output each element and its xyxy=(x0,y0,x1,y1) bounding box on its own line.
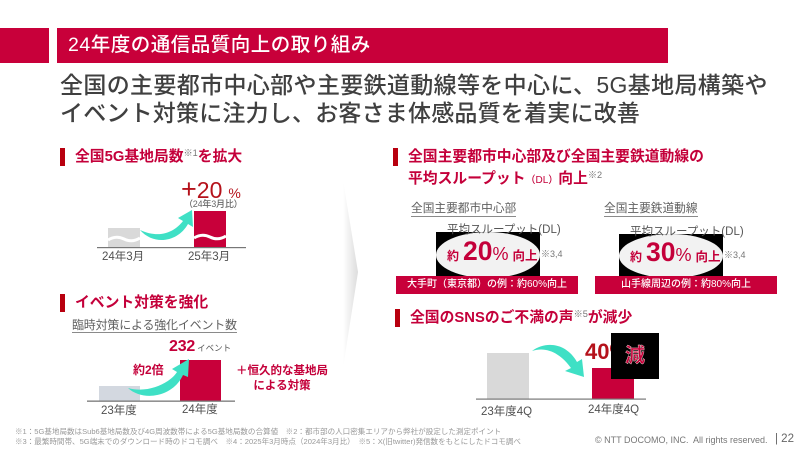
axis label: 24年度4Q: 24年度4Q xyxy=(588,404,639,416)
panel: event measures xyxy=(60,294,328,417)
axis label: 24年3月: 24年3月 xyxy=(102,251,144,263)
banner: Yamanote: 山手線周辺の例：約80%向上 xyxy=(621,279,751,290)
panel: throughput xyxy=(393,148,777,294)
bar chart: complaints xyxy=(476,344,646,400)
axis label: 23年度: 23年度 xyxy=(101,405,137,417)
banner: Yamanote xyxy=(595,276,777,294)
headline: 全国の主要都市中心部や主要鉄道動線等を中心に、5G基地局構築や xyxy=(60,72,768,98)
black backing xyxy=(619,234,723,276)
footnotes xyxy=(15,427,521,446)
title xyxy=(57,28,668,63)
page number: | 22 xyxy=(775,433,794,445)
section heading: 全国主要都市中心部及び全国主要鉄道動線の xyxy=(408,149,704,165)
section marker xyxy=(60,294,65,312)
footnotes: ※3：最繁時間帯、5G端末でのダウンロード時のドコモ調べ ※4：2025年3月時点（2024年3月比） ※5：X(旧twitter)発信数をもとにしたドコモ調べ xyxy=(15,436,521,446)
banner: Otemachi xyxy=(396,276,578,294)
section heading: 全国5G基地局数※1を拡大 xyxy=(75,148,242,165)
note: permanent base stations xyxy=(236,364,328,392)
section marker xyxy=(395,309,400,327)
value: 40%: 40% xyxy=(585,339,629,364)
value: +20%: +20 % xyxy=(181,174,241,204)
footnote ref: ※3,4 xyxy=(724,250,746,260)
section heading: 全国のSNSのご不満の声※5が減少 xyxy=(410,309,632,326)
banner: Otemachi: 大手町（東京都）の例：約60%向上 xyxy=(407,279,567,290)
bar chart: base stations xyxy=(97,210,246,248)
section heading second line: 平均スループット（DL）向上※2 xyxy=(408,170,602,187)
subhead: city centers: 全国主要都市中心部 xyxy=(411,202,516,215)
callout: railways 30% xyxy=(619,234,723,276)
section marker xyxy=(60,148,65,166)
footnotes: ※1：5G基地局数はSub6基地局数及び4G周波数帯による5G基地局数の合算値 ※2：都市部の人口密集エリアから弊社が設定した測定ポイント xyxy=(15,427,501,436)
axis label: 23年度4Q: 23年度4Q xyxy=(481,406,532,418)
label: average throughput: 平均スループット(DL) xyxy=(447,224,561,236)
ellipse xyxy=(436,232,540,278)
axis label: 24年度: 24年度 xyxy=(182,404,218,416)
callout: city centers 20% xyxy=(436,232,540,276)
section marker xyxy=(393,148,398,166)
label: about 2x: 約2倍 xyxy=(133,363,164,377)
note: permanent base stations: による対策 xyxy=(253,380,311,392)
panel: SNS complaints xyxy=(395,309,659,418)
value note: （24年3月比） xyxy=(184,199,242,209)
note: permanent base stations: ＋恒久的な基地局 xyxy=(236,365,328,377)
copyright: © NTT DOCOMO, INC. All rights reserved. xyxy=(595,435,768,445)
footnote ref: ※3,4 xyxy=(541,249,563,259)
bar chart: events xyxy=(87,359,235,402)
black backing xyxy=(436,232,540,276)
ellipse xyxy=(619,234,723,278)
chart subtitle: 臨時対策による強化イベント数 xyxy=(72,318,237,332)
axis label: 25年3月: 25年3月 xyxy=(188,251,230,263)
value: 20%: 約20% 向上 xyxy=(447,236,538,266)
headline second line: イベント対策に注力し、お客さま体感品質を着実に改善 xyxy=(60,100,640,126)
value: 232 events: 232イベント xyxy=(169,338,231,355)
value: 30%: 約30% 向上 xyxy=(630,237,721,267)
callout: decrease xyxy=(611,333,659,379)
panel: 5G base stations xyxy=(60,148,246,263)
decorative chevron separator xyxy=(346,204,358,342)
callout: decrease: 減 xyxy=(625,345,645,367)
title: 24年度の通信品質向上の取り組み xyxy=(68,34,371,56)
header accent block xyxy=(0,28,49,63)
section heading: イベント対策を強化 xyxy=(75,295,208,311)
label: average throughput: 平均スループット(DL) xyxy=(630,226,744,238)
subhead: railways: 全国主要鉄道動線 xyxy=(604,202,698,215)
